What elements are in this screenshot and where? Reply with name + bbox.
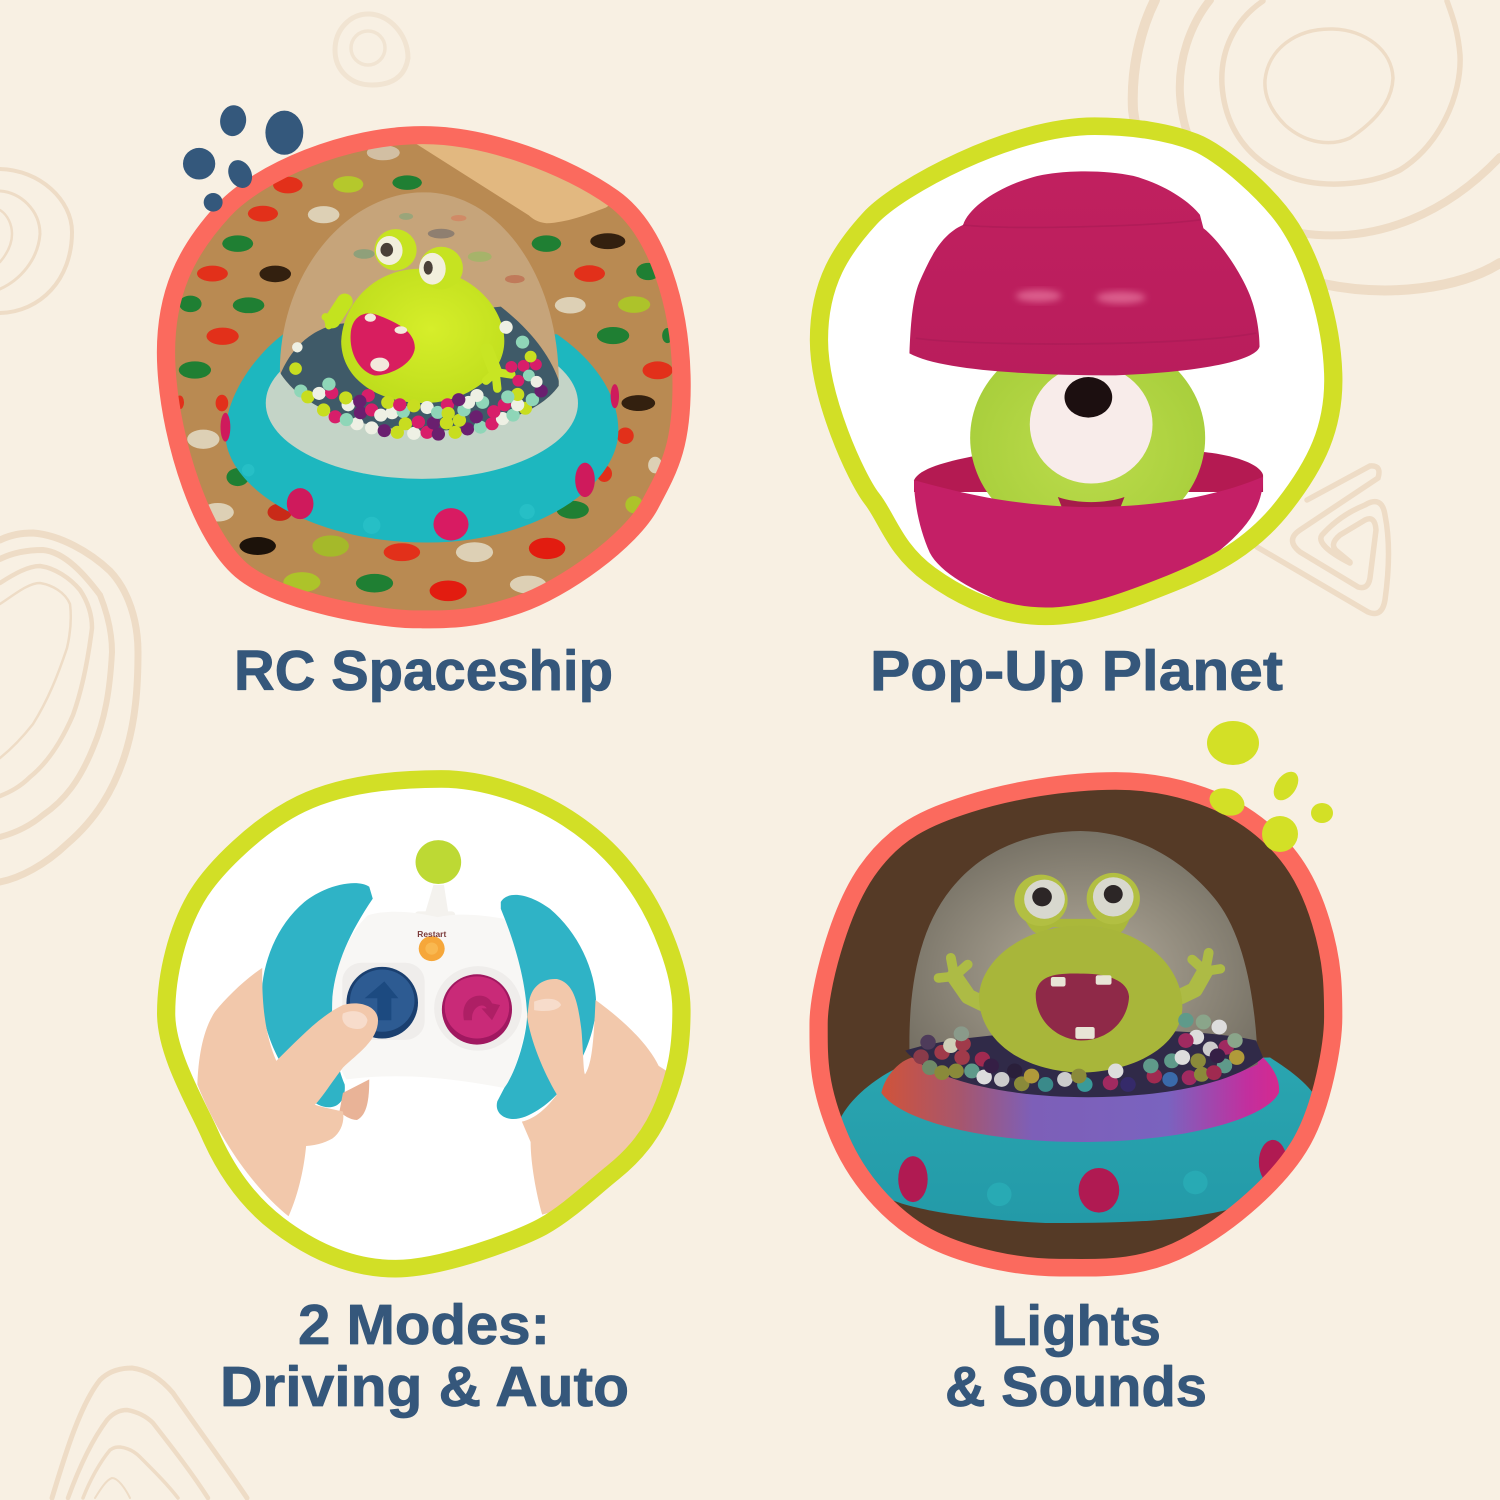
panel: 2 Modes remote: [166, 779, 681, 1269]
wood block: [417, 144, 608, 224]
remote teal grips: [262, 883, 373, 1107]
restart label: Restart: [417, 930, 447, 939]
remote body: [332, 912, 527, 1088]
panel: RC Spaceship: [150, 104, 700, 634]
label: Lights and Sounds: [945, 1294, 1207, 1419]
label: Lights and Sounds: & Sounds: [945, 1355, 1207, 1419]
planet top shell: [909, 171, 1260, 375]
dots: lime splash: [1206, 721, 1333, 852]
planet lower shell inside: [914, 452, 1263, 492]
hands: [197, 968, 669, 1216]
remote buttons: [342, 930, 522, 1051]
label: Lights and Sounds: Lights: [992, 1294, 1161, 1358]
label: 2 Modes: Driving & Auto: [220, 1355, 629, 1419]
panel: Pop-Up Planet: [819, 126, 1333, 616]
spaceship alien: [325, 229, 511, 403]
photo: pop-up planet: [909, 171, 1263, 610]
panel: Lights & Sounds: [819, 781, 1333, 1268]
dots: navy splash: [183, 104, 303, 212]
spaceship saucer: [221, 327, 619, 543]
spaceship dome: [280, 192, 559, 431]
label: 2 Modes: [220, 1293, 629, 1419]
photo: glowing spaceship: [840, 831, 1323, 1223]
polka dots: [176, 145, 673, 601]
glowing ring: [881, 1057, 1279, 1142]
label: RC Spaceship: RC Spaceship: [234, 639, 613, 703]
glowing dome: [909, 831, 1258, 1091]
glowing alien: [939, 873, 1220, 1073]
glowing saucer: [840, 1057, 1323, 1223]
label: Pop-Up Planet: Pop-Up Planet: [870, 639, 1283, 703]
dome base: [905, 1030, 1263, 1097]
spaceship beads: [289, 321, 548, 441]
glowing beads: [913, 1013, 1244, 1092]
remote antenna: [415, 840, 461, 920]
photo: remote control: [197, 840, 669, 1216]
planet lower shell: [914, 477, 1263, 610]
photo: spaceship on polka dot paper: [175, 144, 672, 610]
label: 2 Modes: 2 Modes:: [298, 1293, 550, 1357]
planet alien: [970, 371, 1206, 508]
